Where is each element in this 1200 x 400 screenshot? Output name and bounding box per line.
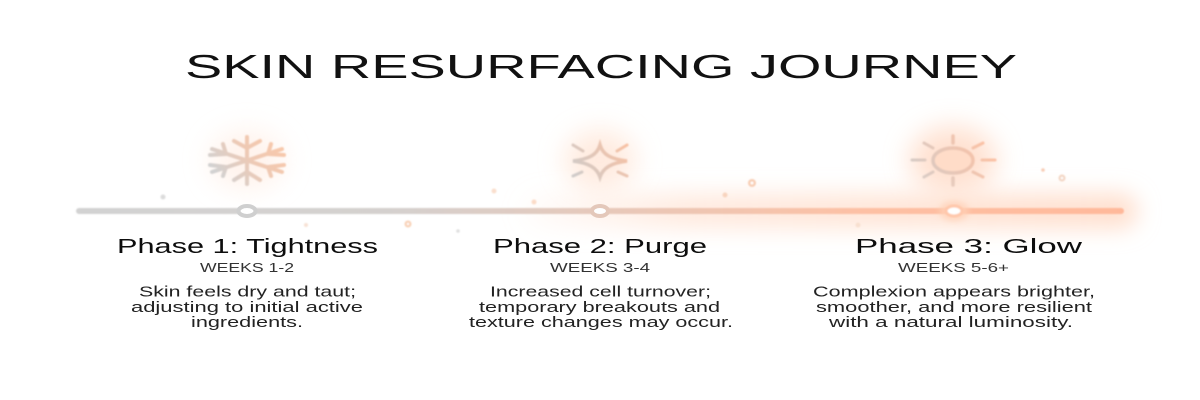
icon: sun (909, 126, 997, 194)
panel: phase 2 (469, 236, 733, 331)
label: weeks 5-6+: WEEKS 5-6+ (898, 261, 1009, 275)
heading: phase 1: Phase 1: Tightness (117, 236, 378, 258)
node: phase 3 (939, 201, 969, 221)
description: phase 1: Skin feels dry and taut; (139, 284, 356, 300)
decorative particles (160, 168, 1066, 233)
description: phase 2 (469, 284, 733, 331)
panel: phase 1 (117, 236, 378, 331)
description: phase 3: Complexion appears brighter, (813, 284, 1095, 300)
timeline track (76, 193, 1138, 229)
description: phase 3: smoother, and more resilient (816, 300, 1092, 316)
description: phase 2: texture changes may occur. (469, 315, 733, 331)
icon: sparkle (564, 130, 636, 190)
title: SKIN RESURFACING JOURNEY (185, 48, 1017, 85)
node: phase 1 (238, 206, 256, 216)
description: phase 1 (131, 284, 363, 331)
icon: snowflake (209, 130, 285, 190)
label: weeks 1-2: WEEKS 1-2 (200, 261, 294, 275)
panel: phase 3 (813, 236, 1095, 331)
heading: phase 3: Phase 3: Glow (855, 236, 1083, 258)
heading: phase 2: Phase 2: Purge (493, 236, 707, 258)
description: phase 1: adjusting to initial active (131, 300, 363, 316)
label: weeks 3-4: WEEKS 3-4 (550, 261, 650, 275)
node: phase 2 (592, 206, 608, 216)
description: phase 1: ingredients. (191, 315, 303, 331)
description: phase 2: Increased cell turnover; (490, 284, 711, 300)
description: phase 3: with a natural luminosity. (827, 315, 1073, 331)
description: phase 2: temporary breakouts and (479, 300, 720, 316)
description: phase 3 (813, 284, 1095, 331)
